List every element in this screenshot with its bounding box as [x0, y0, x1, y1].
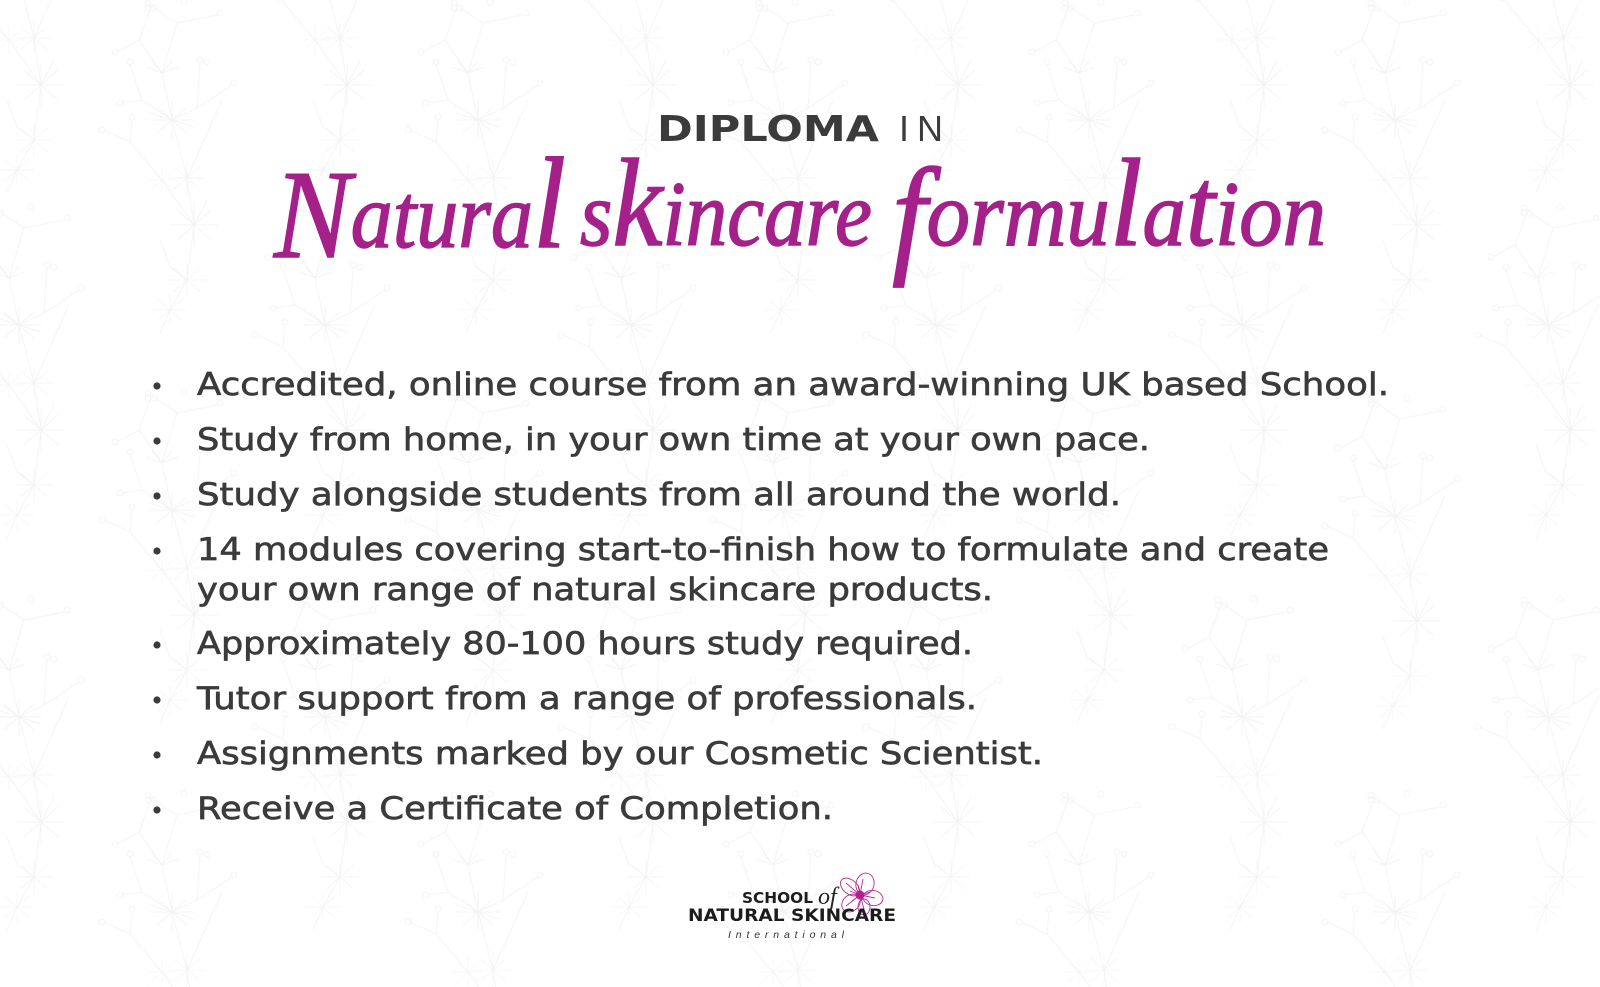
title: Natural skincare formulation script heading: lation: [1110, 135, 1333, 273]
logo: School of Natural Skincare International: [688, 871, 896, 941]
list item 7: Assignments marked by our Cosmetic Scientist.: [197, 736, 1043, 772]
logo text: International: International: [728, 929, 845, 941]
logo text: Natural Skincare: NATURAL SKINCARE: [688, 906, 896, 926]
icon: pink flower: [837, 871, 884, 916]
title: Natural skincare formulation script heading: l: [533, 132, 566, 276]
title: Natural skincare formulation script heading: N: [273, 146, 356, 285]
list item 6: Tutor support from a range of professionals.: [196, 681, 977, 717]
title: Diploma in: IN: [899, 108, 943, 149]
bullet list of course features: [153, 367, 1389, 827]
list item 4: [153, 532, 1329, 608]
logo text: School: SCHOOL: [742, 889, 813, 907]
title: Natural skincare formulation script heading: f: [892, 141, 941, 288]
list item 5: Approximately 80-100 hours study required.: [197, 626, 973, 662]
list item 1: Accredited, online course from an award-winning UK based School.: [197, 367, 1389, 403]
title: Natural skincare formulation script heading: [273, 132, 1326, 288]
title: Diploma in: DIPLOMA: [657, 109, 879, 150]
list item 4: your own range of natural skincare products.: [197, 572, 993, 608]
list item 8: Receive a Certificate of Completion.: [197, 791, 833, 827]
logo text: of: of: [818, 884, 840, 910]
title: Natural skincare formulation script heading: skincare: [580, 135, 872, 273]
list item 3: Study alongside students from all around the world.: [197, 477, 1121, 513]
list item 4: 14 modules covering start-to-finish how to formulate and create: [197, 532, 1329, 568]
title: Natural skincare formulation script heading: ormu: [927, 163, 1110, 265]
title: Diploma in: [657, 108, 943, 150]
list item 2: Study from home, in your own time at your own pace.: [197, 422, 1150, 458]
title: Natural skincare formulation script heading: atura: [351, 165, 533, 267]
